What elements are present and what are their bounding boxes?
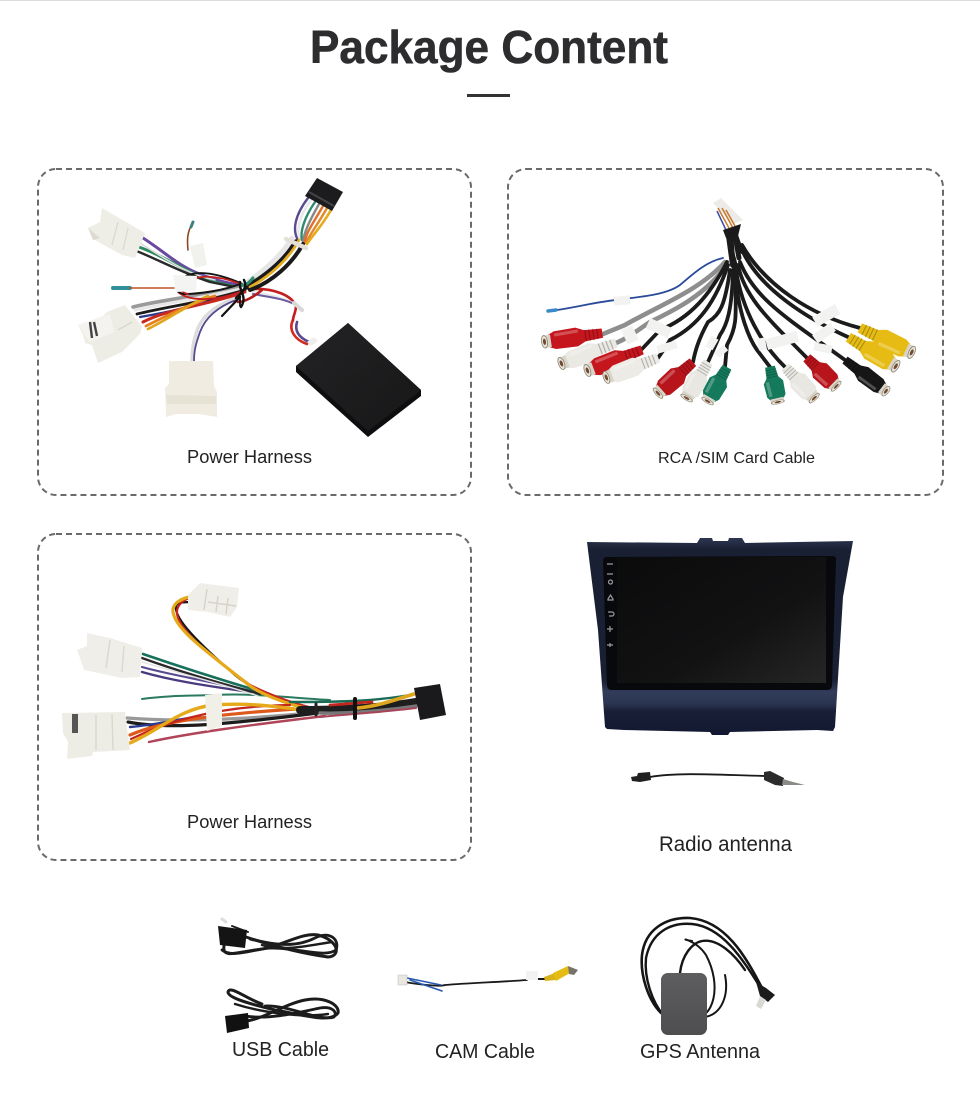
panel: power harness with box xyxy=(38,169,471,495)
panel border xyxy=(38,534,471,860)
illustration: dashboard bezel xyxy=(587,538,853,735)
label: power harness: Power Harness xyxy=(187,812,312,832)
illustration: white connector upper left xyxy=(88,208,145,258)
illustration: USB cable coil upper xyxy=(222,919,337,957)
panel: power harness xyxy=(38,534,471,860)
label: USB cable: USB Cable xyxy=(232,1039,329,1061)
illustration: black connector xyxy=(414,684,446,720)
title: Package Content xyxy=(310,21,668,73)
illustration: white connector top xyxy=(188,583,239,617)
illustration: black box module xyxy=(296,323,421,437)
illustration: yellow RCA plug xyxy=(544,966,578,981)
illustration: USB connector upper xyxy=(218,926,247,948)
label: CAM cable: CAM Cable xyxy=(435,1041,535,1063)
icons: screen side buttons xyxy=(607,564,614,647)
panel border xyxy=(38,169,471,495)
label: power harness: Power Harness xyxy=(187,447,312,467)
illustration: white connector middle xyxy=(77,633,142,678)
illustration: tag xyxy=(526,971,538,980)
illustration: label tag xyxy=(205,693,222,731)
illustration: RCA plugs xyxy=(540,319,919,408)
illustration: white plug xyxy=(398,975,407,985)
title underline xyxy=(467,94,510,97)
panel: RCA SIM card cable xyxy=(508,169,943,495)
illustration: antenna cable xyxy=(631,771,805,786)
illustration: cable fan xyxy=(548,232,860,367)
illustration: screen xyxy=(603,556,836,690)
illustration: harness wires xyxy=(127,596,416,743)
top hairline xyxy=(0,0,980,1)
illustration: white connector bottom xyxy=(165,361,217,417)
panel border xyxy=(508,169,943,495)
label: RCA SIM card cable: RCA /SIM Card Cable xyxy=(658,450,815,467)
illustration: black connector top xyxy=(305,178,343,211)
illustration: white connector lower left xyxy=(78,305,142,363)
item: USB cable xyxy=(218,919,338,1061)
illustration: right-angle plug xyxy=(756,982,775,1009)
illustration: top white connector xyxy=(713,198,743,238)
illustration: camera cable xyxy=(405,978,545,991)
item: GPS antenna xyxy=(640,918,775,1063)
label: GPS antenna: GPS Antenna xyxy=(640,1041,761,1063)
label: radio antenna: Radio antenna xyxy=(659,833,792,856)
illustration: USB connector lower xyxy=(225,1013,249,1033)
illustration: cable tags xyxy=(614,295,840,358)
item: CAM cable xyxy=(398,966,578,1063)
illustration: USB cable coil lower xyxy=(228,990,338,1021)
illustration: GPS puck xyxy=(661,973,707,1035)
product: radio head unit and antenna xyxy=(587,538,853,856)
illustration: power harness wires xyxy=(113,198,331,362)
illustration: label tags xyxy=(173,243,207,292)
illustration: GPS cable coils xyxy=(642,918,762,1020)
illustration: white connector lower xyxy=(62,712,130,759)
